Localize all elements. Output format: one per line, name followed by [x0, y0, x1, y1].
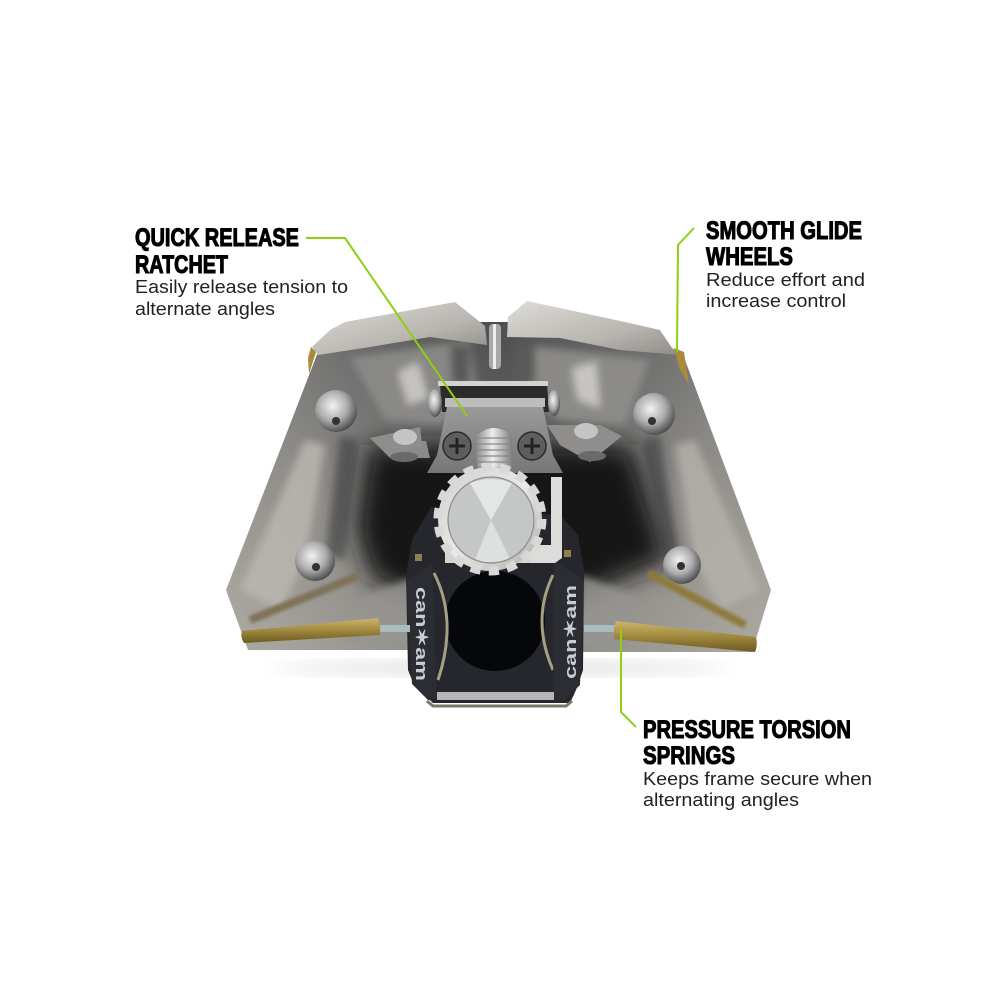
drop shadow under tool — [275, 662, 725, 674]
threaded bolt — [476, 428, 513, 480]
brass wheel right — [674, 348, 689, 385]
side band shading — [325, 435, 678, 560]
brand label left: can✶am — [412, 587, 430, 681]
upper reflections — [350, 340, 650, 425]
left top flap — [312, 302, 487, 355]
dark centre reflection — [355, 445, 670, 600]
callout: quick release ratchet: alternate angles — [135, 298, 275, 319]
ratchet hinge — [428, 381, 560, 417]
callout: smooth glide wheels: WHEELS — [706, 243, 793, 271]
brand label right: can✶am — [562, 585, 580, 679]
callout: smooth glide wheels: SMOOTH GLIDE — [706, 217, 862, 245]
left brass tube — [241, 618, 380, 643]
leader line: smooth glide wheels — [677, 228, 694, 352]
studs — [415, 554, 422, 561]
callout: pressure torsion springs: Keeps frame secure when — [643, 768, 872, 789]
phillips screws — [443, 432, 546, 460]
side strips — [406, 563, 437, 700]
callout: pressure torsion springs: alternating angles — [643, 789, 799, 810]
ratchet plate — [427, 407, 563, 473]
leader line: pressure torsion springs — [621, 630, 636, 727]
callout: smooth glide wheels: increase control — [706, 290, 846, 311]
ratchet knob — [438, 467, 542, 571]
screws — [295, 390, 701, 584]
callout: pressure torsion springs — [643, 716, 872, 810]
callout: smooth glide wheels: Reduce effort and — [706, 269, 865, 290]
product photo: stainless angle head — [226, 301, 771, 706]
callout: quick release ratchet — [135, 224, 348, 319]
right plate — [500, 322, 771, 652]
tube opening — [445, 571, 545, 671]
centre hinge pin — [489, 324, 501, 369]
callout: pressure torsion springs: PRESSURE TORSION — [643, 716, 851, 744]
callout: pressure torsion springs: SPRINGS — [643, 742, 735, 770]
callout: smooth glide wheels — [706, 217, 865, 311]
left plate — [226, 322, 500, 650]
steel rods — [380, 625, 617, 632]
callout: quick release ratchet: RATCHET — [135, 251, 228, 279]
black mount — [406, 507, 584, 706]
bracket edge — [500, 477, 562, 563]
side arm brackets — [370, 423, 622, 462]
inner brass rods — [250, 573, 745, 625]
leader line: quick release ratchet — [306, 238, 467, 416]
right brass tube — [614, 621, 757, 652]
callout: quick release ratchet: Easily release tension to — [135, 276, 348, 297]
right top flap — [507, 301, 682, 355]
brass wheel left — [308, 347, 316, 374]
spring arcs — [434, 573, 553, 680]
bottom clip — [427, 701, 572, 706]
callout: quick release ratchet: QUICK RELEASE — [135, 224, 299, 252]
lower plate sheen — [240, 440, 760, 645]
